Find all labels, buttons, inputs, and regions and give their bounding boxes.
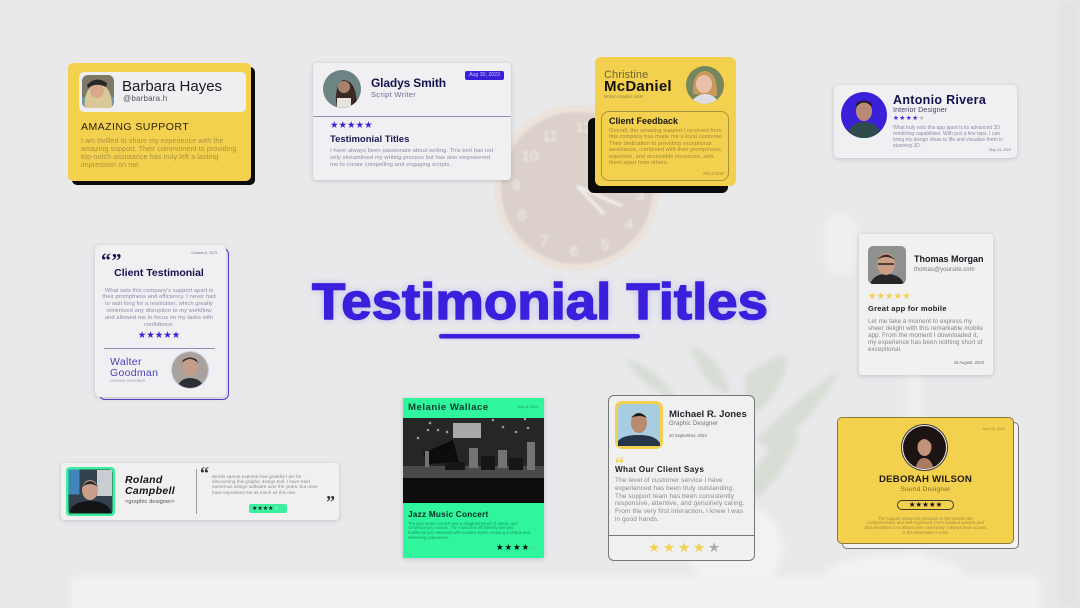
body text: contemporary sounds. The musicians effortlessly blended xyxy=(408,525,513,530)
card: Roland Campbell xyxy=(61,463,339,520)
date: May 14, 2023 xyxy=(989,148,1011,152)
heading: What Our Client Says xyxy=(615,465,704,474)
name: Michael R. Jones xyxy=(669,409,747,420)
body text: What sets this company's support apart is xyxy=(105,288,213,294)
body text: bring my design ideas to life and visualize them in xyxy=(893,136,1003,142)
body text: documentation to a vibrant user community, I always have access xyxy=(865,525,986,530)
body text: The jazz music concert was a delightful blend of classic and xyxy=(408,520,518,526)
body text: I am thrilled to share my experience with the xyxy=(81,136,223,144)
body text: have impressed me as much as this one. xyxy=(212,490,296,495)
name: Walter xyxy=(110,356,142,368)
divider xyxy=(196,469,197,514)
role: Graphic Designer xyxy=(669,421,718,427)
photo: Roland xyxy=(66,467,115,516)
body text: their promptness and efficiency. I never had xyxy=(102,294,216,300)
divider xyxy=(104,348,215,349)
first name: Christine xyxy=(604,69,648,81)
heading: Client Testimonial xyxy=(114,267,204,279)
body text: numerous design software over the years, but none xyxy=(212,484,318,489)
body text: The support resources provided on the website are xyxy=(878,516,973,520)
photo: Antonio xyxy=(841,92,887,138)
last name: McDaniel xyxy=(604,78,672,95)
body text xyxy=(330,148,494,168)
card: Gladys Smith xyxy=(313,63,511,180)
date: June 06, 2023 xyxy=(982,427,1005,431)
name xyxy=(125,474,175,497)
date: April 8, 2023 xyxy=(518,405,538,409)
body text: stunning 3D. xyxy=(893,142,921,148)
body text: my experience has been nothing short of xyxy=(868,339,983,346)
body text xyxy=(893,124,1003,148)
body text: Their dedication to providing exceptional xyxy=(609,140,712,146)
body text xyxy=(81,136,236,169)
email: thomas@yoursite.com xyxy=(914,266,975,272)
photo: Barbara xyxy=(82,75,114,108)
heading: Great app for mobile xyxy=(868,304,947,313)
star rating: ★★★★★ xyxy=(252,505,279,512)
body text: this company has made me a loyal customer. xyxy=(609,134,723,140)
card: Melanie Wallace xyxy=(403,398,544,558)
heading: Client Feedback xyxy=(609,116,678,126)
body text xyxy=(868,318,983,353)
photo: Gladys xyxy=(323,70,361,108)
body text xyxy=(864,516,986,535)
star rating: ★★★★★ xyxy=(868,291,911,302)
name: Barbara Hayes xyxy=(122,78,222,95)
photo: Thomas xyxy=(868,246,906,284)
opening quote: “ xyxy=(615,453,624,473)
photo: Christine xyxy=(686,66,724,104)
star rating xyxy=(249,504,287,513)
background: blurred room with clock, plant and table: 8 xyxy=(518,207,526,224)
heading: Jazz Music Concert xyxy=(408,510,488,519)
role: Sound Designer xyxy=(900,486,951,493)
body text: to wait long for a resolution, which greatly xyxy=(105,301,213,307)
date badge: Aug 30, 2023 xyxy=(469,72,500,78)
background: blurred room with clock, plant and table: 12 xyxy=(576,119,592,136)
body text: refreshing experience. xyxy=(408,535,449,540)
body text: app. From the moment I downloaded it, xyxy=(868,332,978,339)
body text: confidence. xyxy=(144,322,174,328)
body text: discovering this graphic design tool. I have tried xyxy=(212,479,310,484)
name: Gladys Smith xyxy=(371,76,446,90)
photo: Walter xyxy=(171,351,209,389)
star rating: ★★★★★ xyxy=(496,543,539,553)
background: blurred room with clock, plant and table: 9 xyxy=(512,177,520,194)
body text: exceptional. xyxy=(868,346,902,353)
role: Motion Graphic Artist xyxy=(604,94,643,99)
star rating pill: ★★★★★ xyxy=(909,500,942,509)
name xyxy=(110,356,158,378)
body text: I have always been passionate about writing. This tool has not xyxy=(330,148,493,154)
body text xyxy=(408,520,530,540)
background: blurred room with clock, plant and table: 6 xyxy=(570,243,578,260)
background: blurred room with clock, plant and table: 11 xyxy=(542,128,558,145)
body text: Let me take a moment to express my xyxy=(868,318,972,324)
body text: sheer delight with this remarkable mobile xyxy=(868,325,983,332)
photo: Deborah xyxy=(901,424,948,471)
name: DEBORAH WILSON xyxy=(879,474,972,485)
body text: rendering capabilities. With just a few taps, I can xyxy=(893,130,1000,136)
body text: expertise, and accessible resources, sets xyxy=(609,154,714,160)
quote marks: “” xyxy=(101,250,122,272)
star rating: ★★★★★ xyxy=(648,540,723,556)
star rating: ★★★★★ xyxy=(893,114,925,122)
role: Script Writer xyxy=(371,90,416,99)
body text xyxy=(212,474,318,495)
background: blurred room with clock, plant and table: 7 xyxy=(540,233,548,250)
role: GRAPHIC DESIGNER xyxy=(110,379,145,383)
background: blurred room with clock, plant and table: 4 xyxy=(625,216,633,233)
body text: The level of customer service I have xyxy=(615,477,723,484)
photo: jazz concert xyxy=(403,418,544,503)
closing quote: ” xyxy=(326,492,335,512)
card: Michael R. Jones xyxy=(608,395,755,561)
opening quote: “ xyxy=(200,463,209,483)
body text: responsive, attentive, and genuinely caring. xyxy=(615,500,744,507)
date badge xyxy=(465,71,504,80)
name: Campbell xyxy=(125,485,175,497)
body text: The support team has been consistently xyxy=(615,493,734,500)
background: blurred room with clock, plant and table: 10 xyxy=(522,148,538,165)
card: Client Testimonial, Walter Goodman xyxy=(93,244,229,400)
body text: me to create compelling and engaging scripts. xyxy=(330,162,451,168)
body text: Overall, the amazing support I received from xyxy=(609,128,722,134)
title: Testimonial Titles: Testimonial Titles xyxy=(312,273,768,330)
role: Interior Designer xyxy=(893,107,947,114)
star rating: ★★★★★ xyxy=(330,120,373,131)
body text: in good hands. xyxy=(615,516,659,523)
body text: comprehensive and well-organized. From detailed tutorials and xyxy=(867,520,984,525)
card: Antonio Rivera xyxy=(834,85,1017,158)
body text: them apart from others. xyxy=(609,160,669,166)
body text xyxy=(615,477,744,523)
body text: only streamlined my writing process but has also empowered xyxy=(330,154,490,160)
date: October 6, 2023 xyxy=(191,251,217,255)
name: Antonio Rivera xyxy=(893,93,986,107)
body text: experienced has been truly outstanding. xyxy=(615,485,734,492)
feedback box xyxy=(601,111,729,181)
name: Roland xyxy=(125,474,163,486)
card: Barbara Hayes xyxy=(68,63,255,185)
name: Thomas Morgan xyxy=(914,254,984,264)
name: Melanie Wallace xyxy=(408,402,489,413)
body text: From the very first interaction, I knew I was xyxy=(615,508,743,515)
body text: minimized any disruption to my workflow xyxy=(107,308,211,314)
name: Goodman xyxy=(110,366,158,378)
photo: Michael xyxy=(615,401,663,449)
card: Deborah Wilson xyxy=(837,417,1019,549)
body text: impression on me. xyxy=(81,161,140,169)
card: Christine McDaniel xyxy=(588,57,736,193)
body text: to the information I need. xyxy=(902,530,949,535)
body text: amazing support. Their commitment to providing xyxy=(81,145,236,153)
date: 09/11/2023 xyxy=(703,171,724,176)
body text xyxy=(102,288,216,328)
handle: @barbara.h xyxy=(123,94,167,103)
body text: top-notch assistance has truly left a lasting xyxy=(81,153,218,161)
body text: assistance, combined with their promptness, xyxy=(609,147,722,153)
date: 16 August, 2023 xyxy=(954,360,984,365)
heading: AMAZING SUPPORT xyxy=(81,121,189,133)
background: blurred room with clock, plant and table: 5 xyxy=(601,237,609,254)
star rating pill xyxy=(897,500,954,510)
title: Testimonial Titles: Testimonial Titles xyxy=(312,273,768,330)
date: 20 September, 2023 xyxy=(669,433,707,438)
divider xyxy=(609,535,754,536)
body text xyxy=(609,128,723,166)
body text: What truly sets this app apart is its advanced 3D xyxy=(893,124,1000,130)
body text: and allowed me to focus on my tasks with xyxy=(105,315,213,321)
body text: Words cannot express how grateful I am for xyxy=(212,474,302,479)
divider xyxy=(313,116,511,117)
heading: Testimonial Titles xyxy=(330,134,409,145)
star rating: ★★★★★ xyxy=(138,330,180,341)
background: blurred room with clock, plant and table: 3 xyxy=(636,187,644,204)
card: Thomas Morgan xyxy=(859,234,993,375)
body text: traditional jazz elements with modern styles, creating a unique and xyxy=(408,530,530,535)
role: <graphic designer> xyxy=(125,498,175,504)
